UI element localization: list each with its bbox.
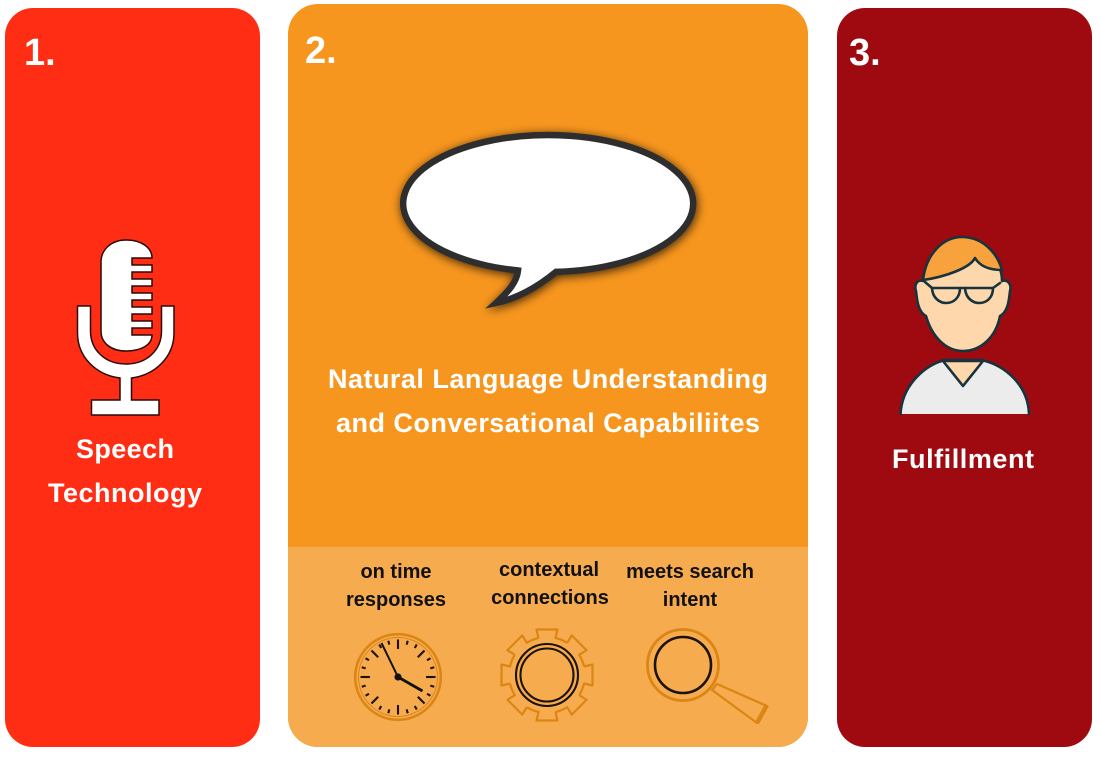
icon: magnifying glass [648,630,767,723]
label: meets search intent: intent [663,589,718,611]
panel 2 lower band [288,547,808,747]
panel 2 background [288,4,808,747]
label: on time responses: on time [360,561,432,583]
label: meets search intent [626,561,754,611]
panel: natural language understanding [288,4,808,747]
panel 1 background [5,8,260,747]
label: on time responses: responses [346,589,446,611]
label: contextual connections: connections [491,587,609,609]
heading: speech technology: Technology [48,478,202,508]
heading: natural language understanding [328,364,768,438]
panel: fulfillment [837,8,1092,747]
icon: person [900,237,1029,414]
heading: speech technology [48,434,202,508]
label: contextual connections [491,559,609,609]
heading: speech technology: Speech [76,434,174,464]
panel 2 number: 2. [305,30,337,72]
icon: gear [501,629,593,721]
heading: fulfillment: Fulfillment [892,444,1034,474]
icon: clock [355,634,441,720]
label: on time responses [346,561,446,611]
icon: microphone [78,240,174,415]
panel 3 number: 3. [849,32,881,74]
panel: speech technology [5,8,260,747]
heading: natural language understanding: and Conversational Capabiliites [336,408,760,438]
panel 3 background [837,8,1092,747]
heading: natural language understanding: Natural Language Understanding [328,364,768,394]
label: contextual connections: contextual [499,559,599,581]
icon: speech bubble [403,135,693,303]
panel 1 number: 1. [24,32,56,74]
label: meets search intent: meets search [626,561,754,583]
